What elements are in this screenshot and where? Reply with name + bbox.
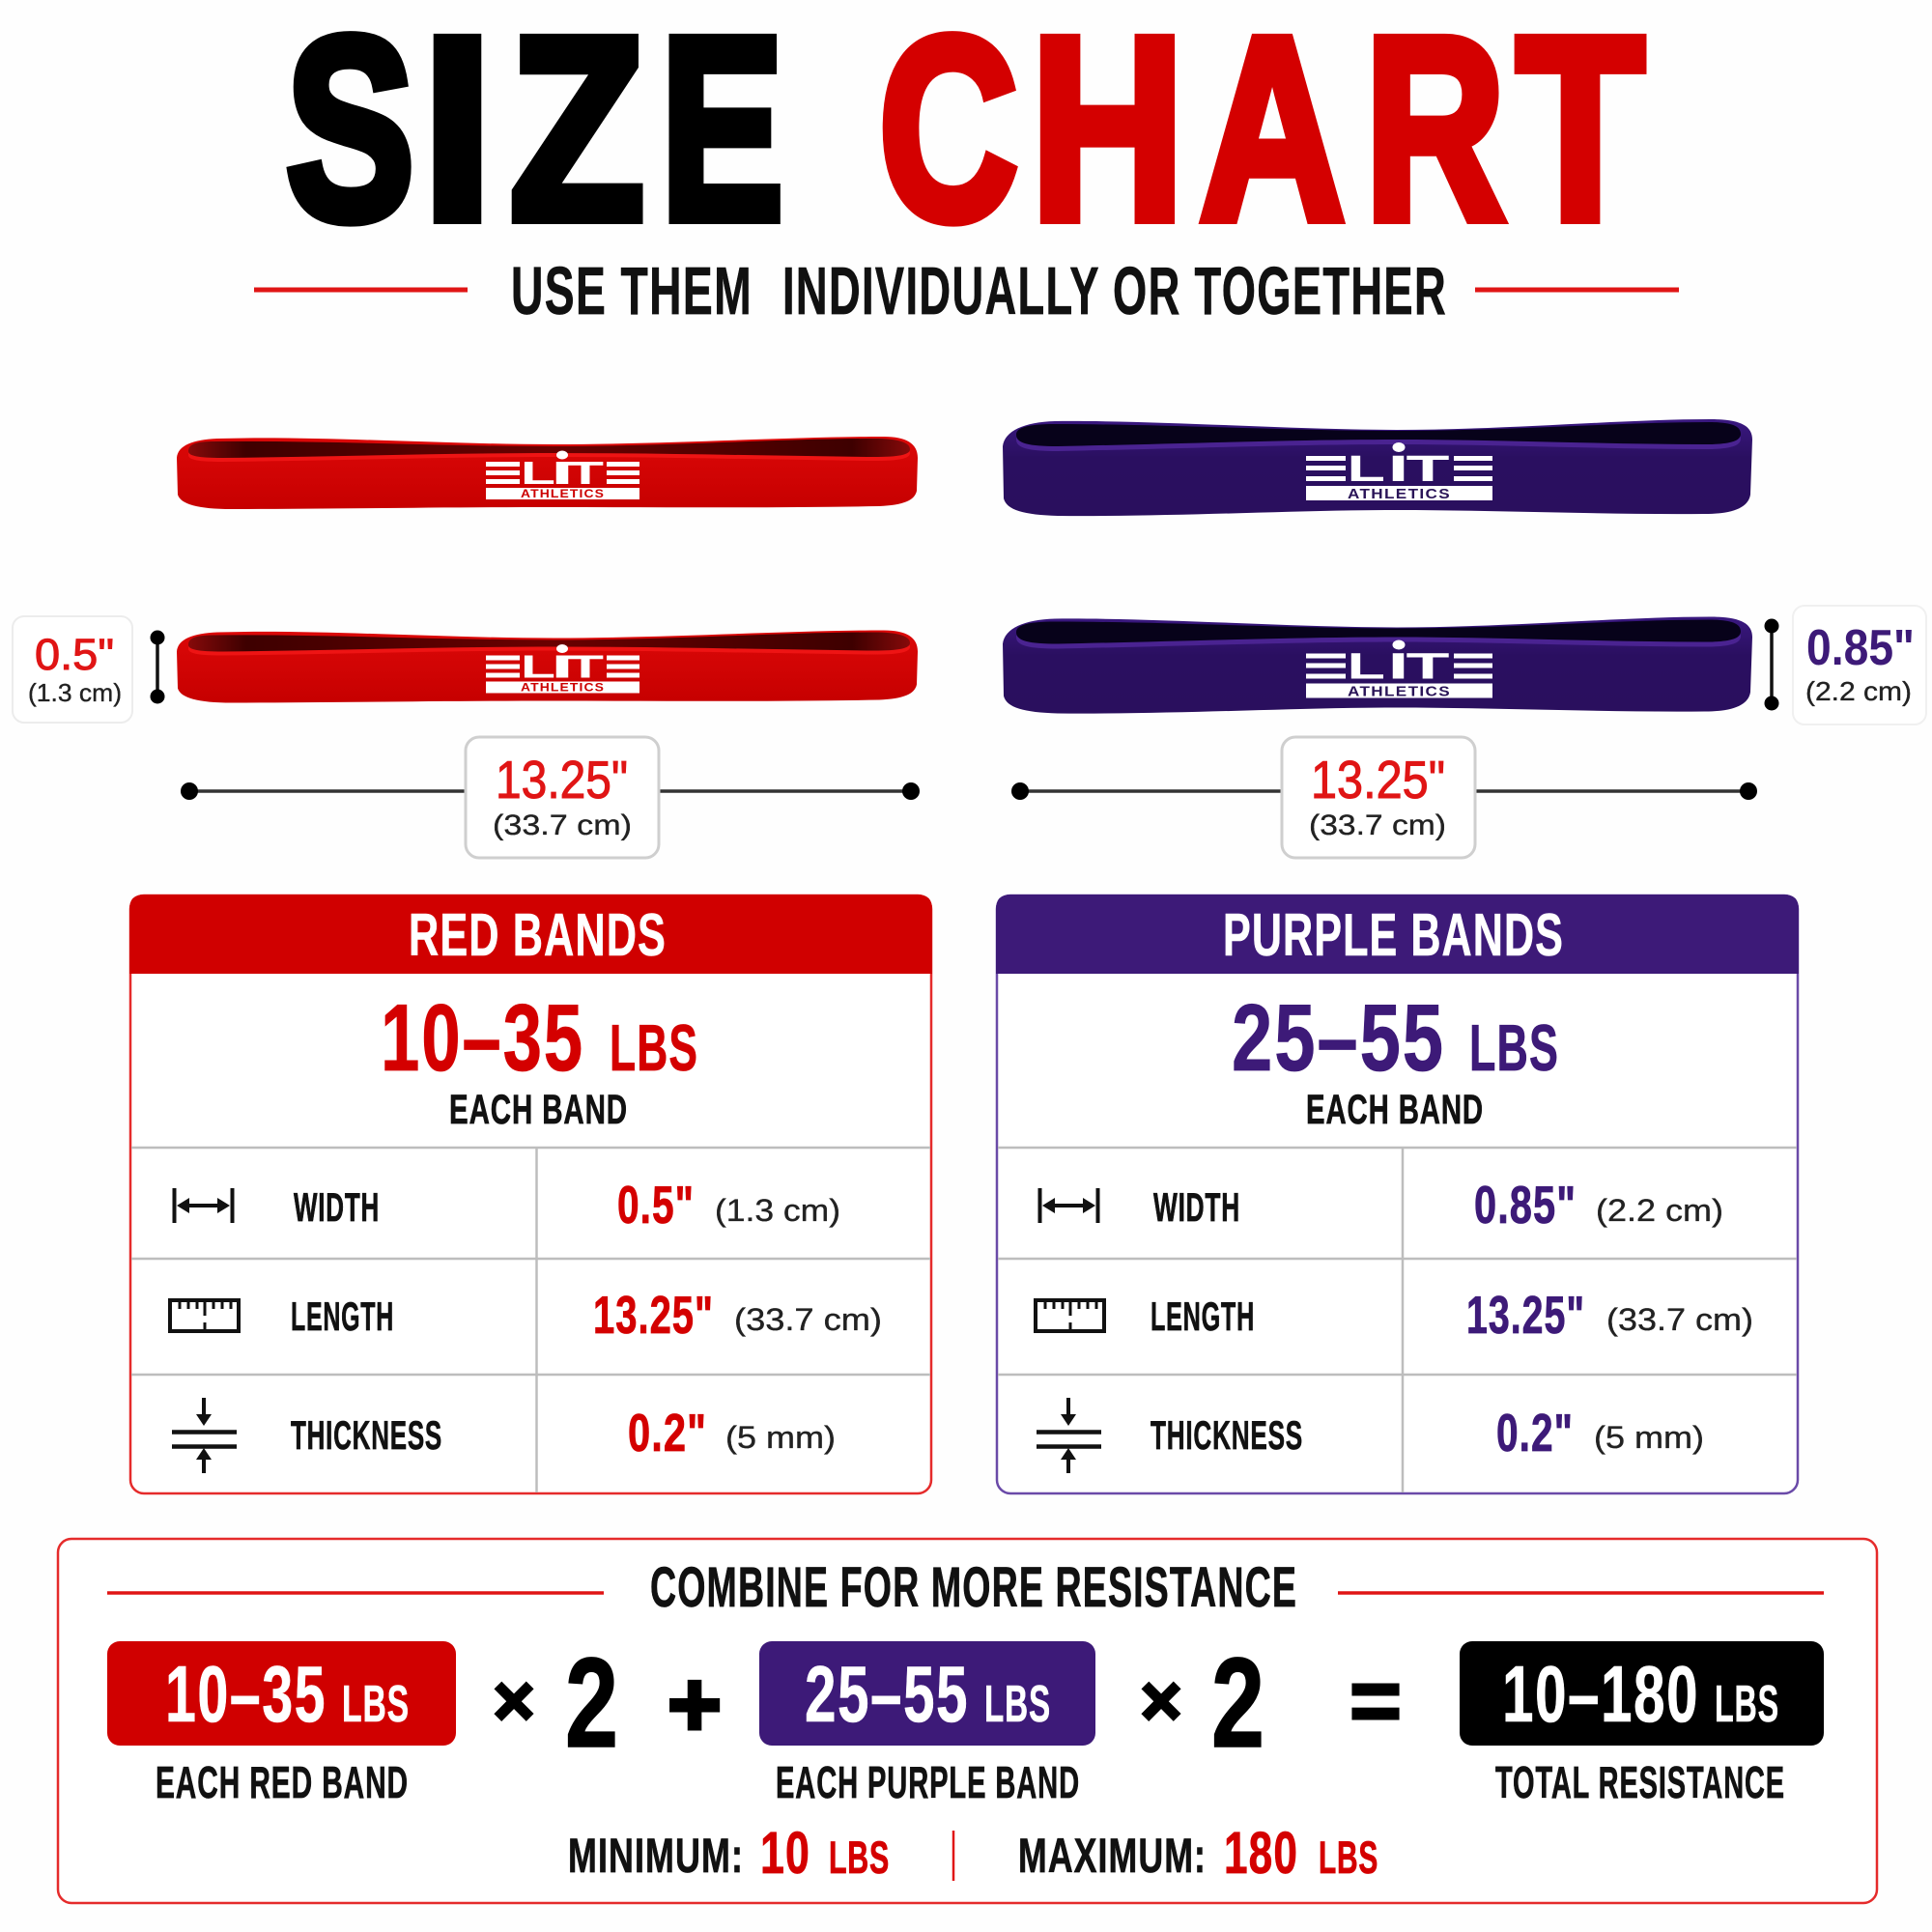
pill: red band	[107, 1641, 456, 1746]
value: width	[617, 1175, 840, 1235]
logo: elite athletics: ATHLETICS	[521, 682, 605, 694]
value: thickness	[1496, 1403, 1704, 1463]
value: thickness	[628, 1403, 836, 1463]
operator: times 2	[1140, 1632, 1264, 1774]
logo: elite athletics: I	[551, 649, 574, 684]
pill: purple band: 25–55	[805, 1649, 969, 1739]
logo: elite athletics: L	[1347, 449, 1385, 490]
arrow: red length dimension	[181, 782, 920, 800]
logo: elite athletics: T	[567, 455, 604, 491]
maximum: MAXIMUM:	[1018, 1829, 1207, 1883]
purple band top	[1003, 419, 1752, 516]
subtitle: INDIVIDUALLY OR TOGETHER	[782, 253, 1447, 328]
logo: elite athletics: T	[567, 649, 604, 684]
value: length: (33.7 cm)	[1606, 1302, 1753, 1337]
minimum: MINIMUM:	[568, 1829, 744, 1883]
logo: elite athletics: T	[1406, 647, 1449, 688]
logo: elite athletics	[486, 450, 639, 500]
pill: red band: 10–35	[165, 1649, 327, 1739]
callout: red length: 13.25"	[496, 750, 628, 810]
value: width: 0.5"	[617, 1175, 695, 1235]
each band label: EACH BAND	[1306, 1087, 1484, 1133]
operator: times 2: ×	[1140, 1661, 1182, 1741]
logo: elite athletics	[486, 644, 639, 694]
minimum	[568, 1820, 890, 1886]
logo: elite athletics: I	[1387, 449, 1408, 490]
pill: purple band	[759, 1641, 1095, 1746]
operator: times 2: ×	[493, 1661, 535, 1741]
logo: elite athletics: L	[521, 455, 555, 491]
logo: elite athletics: ATHLETICS	[521, 489, 605, 500]
callout: purple length: 13.25"	[1311, 750, 1445, 810]
operator: equals: =	[1350, 1652, 1402, 1750]
icon: ruler	[170, 1300, 239, 1331]
arrow: red width dimension	[151, 630, 164, 703]
value: width	[1474, 1175, 1723, 1235]
callout: red length: (33.7 cm)	[493, 810, 632, 841]
value: width: (1.3 cm)	[715, 1193, 840, 1228]
heading: combine: COMBINE FOR MORE RESISTANCE	[650, 1556, 1297, 1619]
value: length: 13.25"	[1466, 1285, 1585, 1345]
logo: elite athletics: T	[1406, 449, 1449, 490]
minimum: 10	[760, 1820, 810, 1886]
logo: elite athletics: L	[521, 649, 555, 684]
label: width: WIDTH	[294, 1184, 380, 1230]
value: length: (33.7 cm)	[734, 1302, 882, 1337]
icon: width	[1039, 1188, 1097, 1223]
value: thickness: (5 mm)	[1594, 1420, 1704, 1455]
purple band bottom	[1003, 616, 1752, 714]
value: length: 13.25"	[593, 1285, 714, 1345]
pill: red band: LBS	[342, 1675, 410, 1733]
icon: ruler	[1036, 1300, 1104, 1331]
operator: plus: +	[668, 1653, 722, 1756]
icon: width	[174, 1188, 232, 1223]
maximum: 180	[1224, 1820, 1298, 1886]
resistance: purple: LBS	[1469, 1011, 1559, 1085]
minimum: LBS	[829, 1832, 890, 1883]
pill: purple band: LBS	[984, 1675, 1051, 1733]
resistance: red: 10–35	[381, 984, 584, 1091]
label: each red band: EACH RED BAND	[156, 1757, 409, 1807]
logo: elite athletics: ATHLETICS	[1348, 487, 1451, 502]
maximum: LBS	[1319, 1832, 1378, 1883]
logo: elite athletics: L	[1347, 647, 1385, 688]
callout: red width: (1.3 cm)	[28, 678, 122, 707]
callout: purple width: 0.85"	[1806, 620, 1915, 676]
callout: purple width: (2.2 cm)	[1805, 676, 1912, 706]
logo: elite athletics: I	[551, 455, 574, 491]
logo: elite athletics	[1306, 442, 1492, 502]
callout: red width: 0.5"	[35, 630, 114, 679]
operator: times 2: 2	[1211, 1632, 1264, 1774]
label: length: LENGTH	[291, 1293, 394, 1339]
callout: red width	[13, 616, 132, 723]
label: width: WIDTH	[1153, 1184, 1240, 1230]
label: length: LENGTH	[1151, 1293, 1255, 1339]
resistance: red: LBS	[610, 1011, 698, 1085]
icon: thickness	[1037, 1398, 1101, 1473]
callout: purple length: (33.7 cm)	[1309, 810, 1446, 841]
logo: elite athletics: I	[1387, 647, 1408, 688]
arrow: purple length dimension	[1011, 782, 1757, 800]
value: thickness: 0.2"	[628, 1403, 707, 1463]
value: width: (2.2 cm)	[1596, 1193, 1723, 1228]
subtitle: USE THEM	[511, 253, 753, 328]
label: thickness: THICKNESS	[291, 1412, 442, 1458]
icon: thickness	[172, 1398, 237, 1473]
value: length	[1466, 1285, 1753, 1345]
panel: red bands	[129, 895, 932, 1493]
subtitle	[254, 253, 1679, 328]
panel: purple bands	[996, 895, 1799, 1493]
logo: elite athletics: ATHLETICS	[1348, 684, 1451, 699]
pill: total: LBS	[1715, 1675, 1779, 1733]
logo: elite athletics	[1306, 639, 1492, 699]
title	[286, 0, 1644, 274]
value: thickness: (5 mm)	[725, 1420, 836, 1455]
heading: red bands: RED BANDS	[409, 902, 667, 969]
value: length	[593, 1285, 882, 1345]
each band label: EACH BAND	[449, 1087, 628, 1133]
value: width: 0.85"	[1474, 1175, 1577, 1235]
maximum	[1018, 1820, 1378, 1886]
operator: times 2	[493, 1632, 618, 1774]
operator: times 2: 2	[565, 1632, 618, 1774]
label: each purple band: EACH PURPLE BAND	[776, 1757, 1080, 1807]
callout: purple length	[1282, 737, 1475, 858]
red band bottom	[177, 630, 918, 703]
callout: purple width	[1793, 606, 1926, 724]
value: thickness: 0.2"	[1496, 1403, 1574, 1463]
pill: total	[1460, 1641, 1824, 1746]
arrow: purple width dimension	[1764, 618, 1779, 711]
callout: red length	[466, 737, 659, 858]
red band top	[177, 437, 918, 509]
panel: combine for more resistance	[58, 1539, 1877, 1903]
pill: total: 10–180	[1502, 1649, 1699, 1739]
resistance: purple: 25–55	[1232, 984, 1445, 1091]
label: thickness: THICKNESS	[1151, 1412, 1303, 1458]
heading: purple bands: PURPLE BANDS	[1223, 902, 1564, 969]
